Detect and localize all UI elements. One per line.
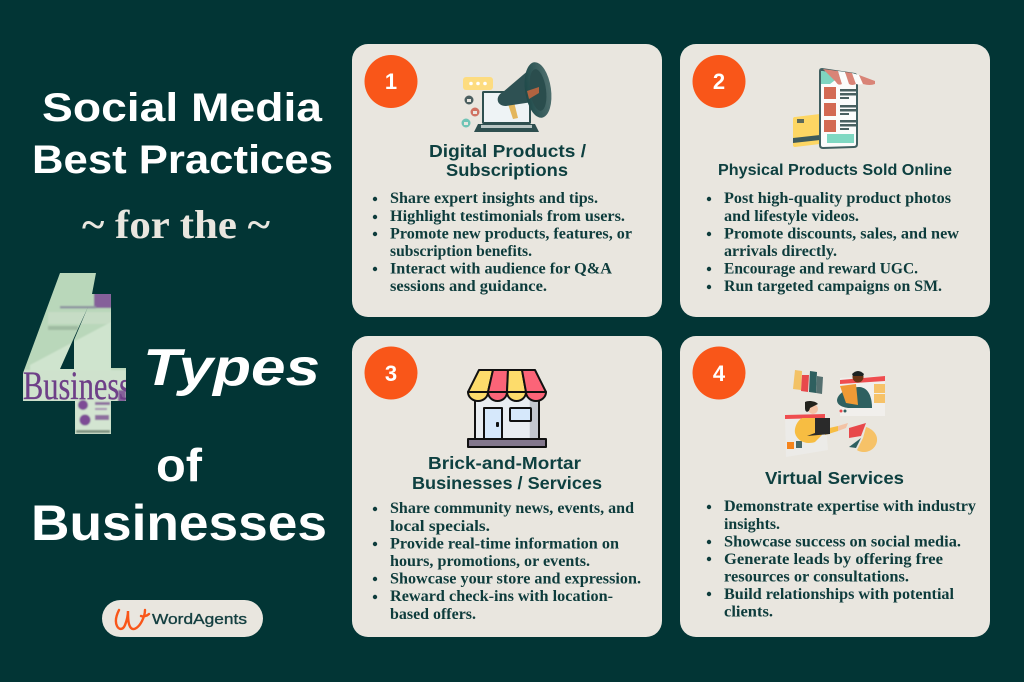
bullet list: [373, 500, 641, 623]
bullet list: Showcase success on social media.: [724, 534, 961, 550]
bullet list: Interact with audience for Q&A: [390, 260, 613, 278]
bullet list: arrivals directly.: [724, 243, 837, 260]
heading: Virtual Services: [765, 468, 904, 488]
panel: brick-and-mortar: [352, 336, 662, 637]
title: Social Media Best Practices: [32, 86, 333, 182]
title: Social Media Best Practices: Best Practices: [32, 138, 333, 182]
bullet list: subscription benefits.: [390, 243, 532, 260]
bullet list: clients.: [724, 604, 773, 620]
title: of: of: [156, 439, 203, 491]
title: Businesses: Businesses: [31, 495, 327, 551]
icon: virtual team with charts: [785, 370, 885, 457]
logo: WordAgents: WordAgents: [152, 611, 247, 628]
logo: WordAgents: [102, 600, 263, 637]
heading: Physical Products Sold Online: [718, 162, 952, 179]
bullet list: insights.: [724, 516, 780, 533]
heading: Brick-and-Mortar: [428, 453, 581, 473]
bullet list: Run targeted campaigns on SM.: [724, 278, 942, 295]
bullet list: sessions and guidance.: [390, 278, 547, 295]
bullet list: resources or consultations.: [724, 568, 909, 586]
bullet list: Demonstrate expertise with industry: [724, 498, 976, 515]
number badge 2: [692, 55, 746, 108]
bullet list: Share expert insights and tips.: [390, 190, 598, 207]
title: Types: Types: [143, 339, 320, 397]
icon: phone storefront and credit card: [793, 68, 875, 149]
bullet list: Share community news, events, and: [390, 500, 634, 517]
numeral 4 filled with a magazine photo: [23, 273, 126, 434]
bullet list: local specials.: [390, 518, 490, 535]
number badge 3: [364, 346, 418, 400]
heading: Businesses / Services: [412, 473, 602, 493]
bullet list: and lifestyle videos.: [724, 208, 859, 225]
title: Social Media Best Practices: Social Media: [42, 86, 323, 130]
bullet list: Post high-quality product photos: [724, 190, 951, 207]
bullet list: [707, 498, 976, 620]
panel: digital products: [352, 44, 662, 317]
subtitle: for the: ~ for the ~: [82, 202, 270, 247]
number badge 2: 2: [713, 69, 725, 94]
bullet list: hours, promotions, or events.: [390, 553, 590, 570]
number badge 4: 4: [713, 361, 726, 386]
bullet list: Reward check-ins with location-: [390, 588, 613, 605]
bullet list: Promote discounts, sales, and new: [724, 226, 960, 242]
bullet list: [707, 190, 960, 295]
heading: [429, 141, 586, 180]
panel: physical products: [680, 44, 990, 317]
heading: [412, 453, 602, 493]
panel: virtual services: [680, 336, 990, 637]
bullet list: based offers.: [390, 606, 476, 623]
bullet list: Showcase your store and expression.: [390, 570, 641, 588]
bullet list: Build relationships with potential: [724, 586, 955, 603]
bullet list: Provide real-time information on: [390, 536, 619, 552]
heading: Digital Products /: [429, 141, 586, 161]
icon: laptop and megaphone: [462, 60, 555, 132]
bullet list: Generate leads by offering free: [724, 551, 943, 568]
icon: storefront: [468, 370, 546, 447]
number badge 4: [692, 346, 746, 400]
number badge 1: 1: [385, 69, 397, 94]
heading: Subscriptions: [446, 160, 568, 180]
number badge 1: [364, 55, 418, 108]
bullet list: Highlight testimonials from users.: [390, 208, 625, 225]
bullet list: Encourage and reward UGC.: [724, 260, 918, 278]
numeral 4 filled with a magazine photo: Business: [23, 363, 131, 408]
number badge 3: 3: [385, 361, 397, 386]
bullet list: [373, 190, 632, 295]
bullet list: Promote new products, features, or: [390, 226, 632, 242]
